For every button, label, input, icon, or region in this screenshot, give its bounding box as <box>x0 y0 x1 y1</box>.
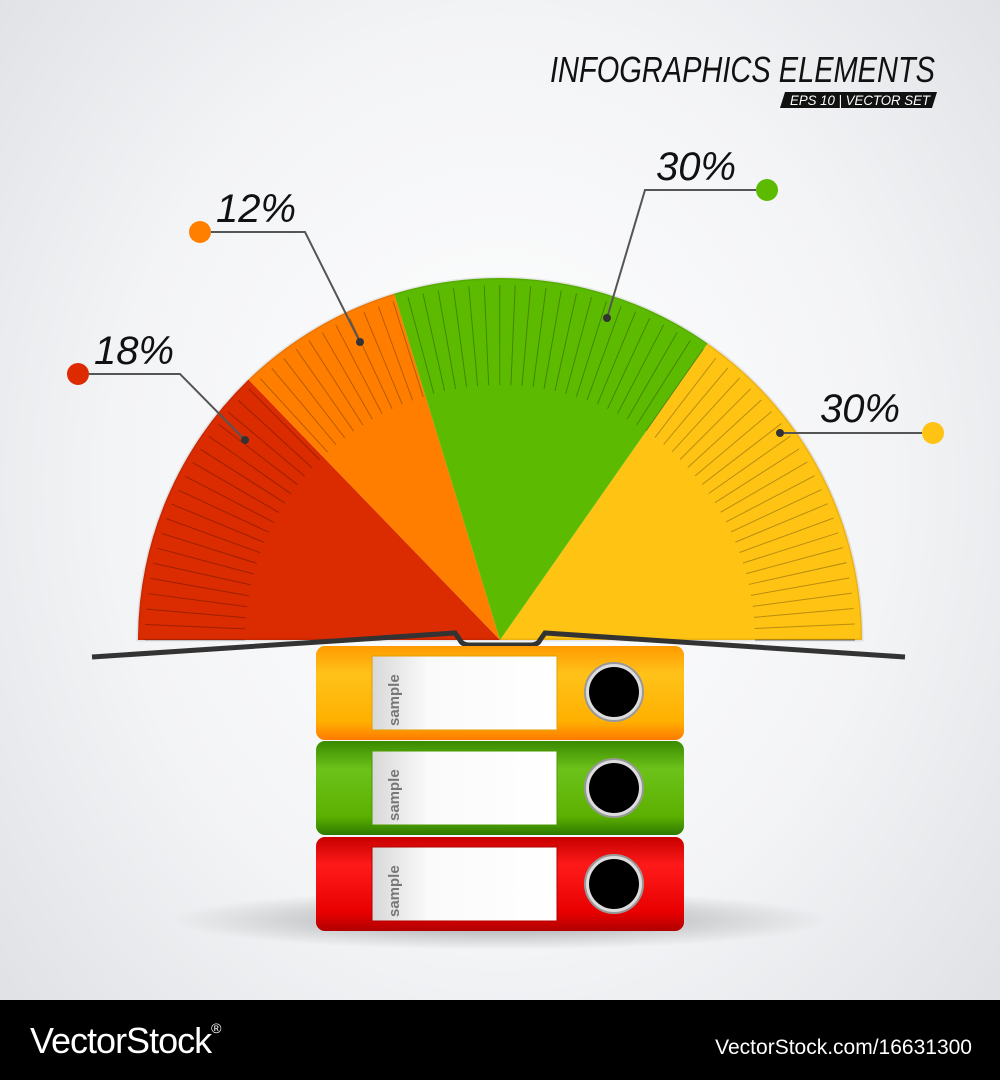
footer url: VectorStock.com/16631300 <box>715 1036 972 1059</box>
callout: 30% yellow: 30% <box>820 387 900 431</box>
binder: green <box>316 741 684 835</box>
callout: 30% green <box>603 145 778 322</box>
segment: yellow 30% <box>500 344 862 640</box>
callout: 18% <box>67 329 249 444</box>
binder: orange <box>316 646 684 740</box>
semicircle chart <box>136 276 864 642</box>
binder: red: sample <box>386 865 403 917</box>
title <box>550 49 937 108</box>
segment: red 18% <box>138 380 500 640</box>
book line <box>92 633 905 657</box>
callout: 18%: 18% <box>94 329 174 373</box>
footer <box>0 1000 1000 1080</box>
shadow under binders <box>170 890 830 950</box>
callout: 12% <box>189 187 364 346</box>
binder: orange: sample <box>386 674 403 726</box>
callout: 30% green: 30% <box>656 145 736 189</box>
main graphic <box>67 56 944 947</box>
segment: green 30% <box>394 278 708 640</box>
footer brand: VectorStock® <box>30 1020 220 1061</box>
binder: red <box>316 837 684 931</box>
binder: green: sample <box>386 769 403 821</box>
title: EPS 10 | VECTOR SET <box>790 92 931 108</box>
callout: 30% yellow <box>776 387 944 444</box>
segment: orange 12% <box>248 294 500 640</box>
callout: 12%: 12% <box>216 187 296 231</box>
